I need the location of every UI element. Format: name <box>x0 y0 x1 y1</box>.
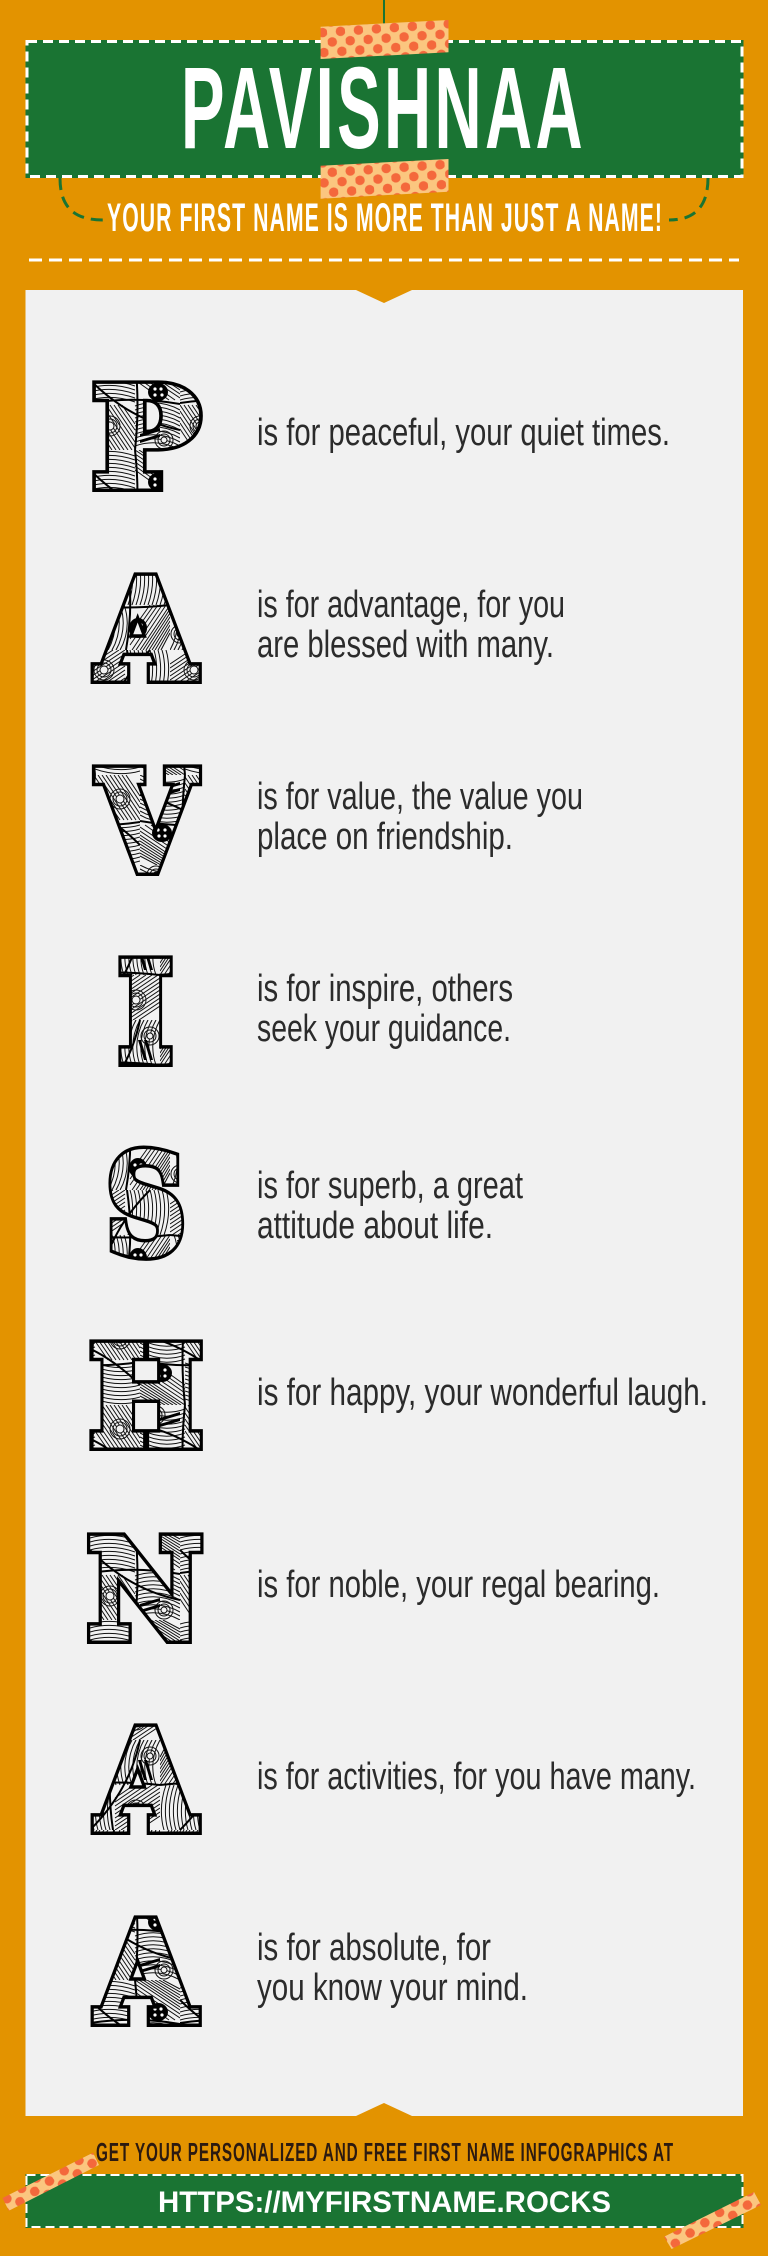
letter row: A <box>96 551 565 709</box>
icon: letter A: A <box>96 1894 196 2052</box>
text: S line 2: attitude about life. <box>257 1205 493 1247</box>
title banner <box>26 40 744 178</box>
text: V line 2: place on friendship. <box>257 816 513 858</box>
letter row: N <box>88 1511 660 1669</box>
icon: letter A: A <box>96 1894 196 2052</box>
text: A line 2: you know your mind. <box>257 1967 528 2009</box>
text: I line 2: seek your guidance. <box>257 1008 511 1050</box>
dashed connector: left <box>60 178 103 220</box>
icon: letter N: N <box>88 1511 202 1669</box>
icon: letter S: S <box>107 1126 185 1284</box>
tape: footer right <box>664 2192 761 2249</box>
text: V line: is for value, the value you <box>257 776 583 818</box>
icon: letter V: V <box>98 743 196 901</box>
text: A line: is for absolute, for <box>257 1927 491 1969</box>
icon: letter I: I <box>119 934 172 1092</box>
footer banner <box>26 2174 744 2228</box>
icon: letter H: H <box>90 1318 202 1476</box>
tape: footer left <box>2 2153 99 2211</box>
icon: letter H: H <box>90 1318 202 1476</box>
icon: letter V: V <box>98 743 196 901</box>
letter row: I <box>119 934 513 1092</box>
text: A line: is for advantage, for you <box>257 584 565 626</box>
icon: letter A: A <box>96 551 196 709</box>
icon: letter I: I <box>119 934 172 1092</box>
letter row: A (third) <box>96 1894 528 2052</box>
tape: lower <box>321 159 448 199</box>
text: A line 2: are blessed with many. <box>257 624 554 666</box>
icon: letter A: A <box>96 551 196 709</box>
tape: top <box>321 20 448 59</box>
letter row: V <box>98 743 583 901</box>
hanging string <box>383 0 385 24</box>
dashed connector: right <box>669 178 708 220</box>
letter row: S <box>107 1126 523 1284</box>
footer url: HTTPS://MYFIRSTNAME.ROCKS <box>158 2186 611 2219</box>
icon: letter P: P <box>93 359 199 517</box>
icon: letter P: P <box>93 359 199 517</box>
icon: letter S: S <box>107 1126 185 1284</box>
text: I line: is for inspire, others <box>257 968 513 1010</box>
text: S line: is for superb, a great <box>257 1165 523 1207</box>
text: N line: is for noble, your regal bearing. <box>257 1564 660 1606</box>
icon: letter N: N <box>88 1511 202 1669</box>
icon: letter A: A <box>96 1702 196 1860</box>
icon: letter A: A <box>96 1702 196 1860</box>
letter row: A (second) <box>96 1702 696 1860</box>
panel: letters <box>26 290 743 2116</box>
letter row: P <box>93 359 670 517</box>
letter row: H <box>90 1318 708 1476</box>
